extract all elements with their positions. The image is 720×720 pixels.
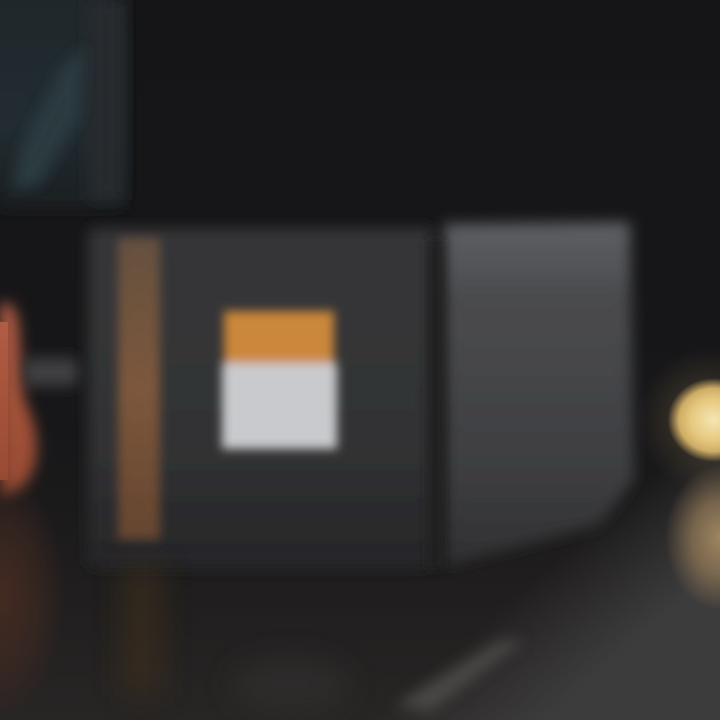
calendar white body: [222, 363, 337, 449]
box right side face: [444, 222, 634, 566]
soft floor patch: [230, 657, 350, 713]
box: dark cube: [88, 222, 634, 570]
calendar label: [222, 311, 337, 449]
box corner shadow: [428, 240, 442, 570]
monitor: blurred screen at top left: [0, 0, 124, 210]
floor highlight streak: [395, 640, 525, 712]
floor: reflective surface: [0, 440, 720, 720]
calendar orange header: [224, 311, 334, 363]
light reflection on floor: [610, 465, 720, 610]
left floor reflection: [0, 470, 130, 720]
box front face: [88, 228, 434, 568]
copper strip: [118, 238, 160, 540]
glowing light at right: [628, 348, 720, 492]
left orange object: [0, 303, 37, 495]
copper strip reflection: [122, 565, 162, 695]
small grey connector at left: [24, 358, 78, 386]
